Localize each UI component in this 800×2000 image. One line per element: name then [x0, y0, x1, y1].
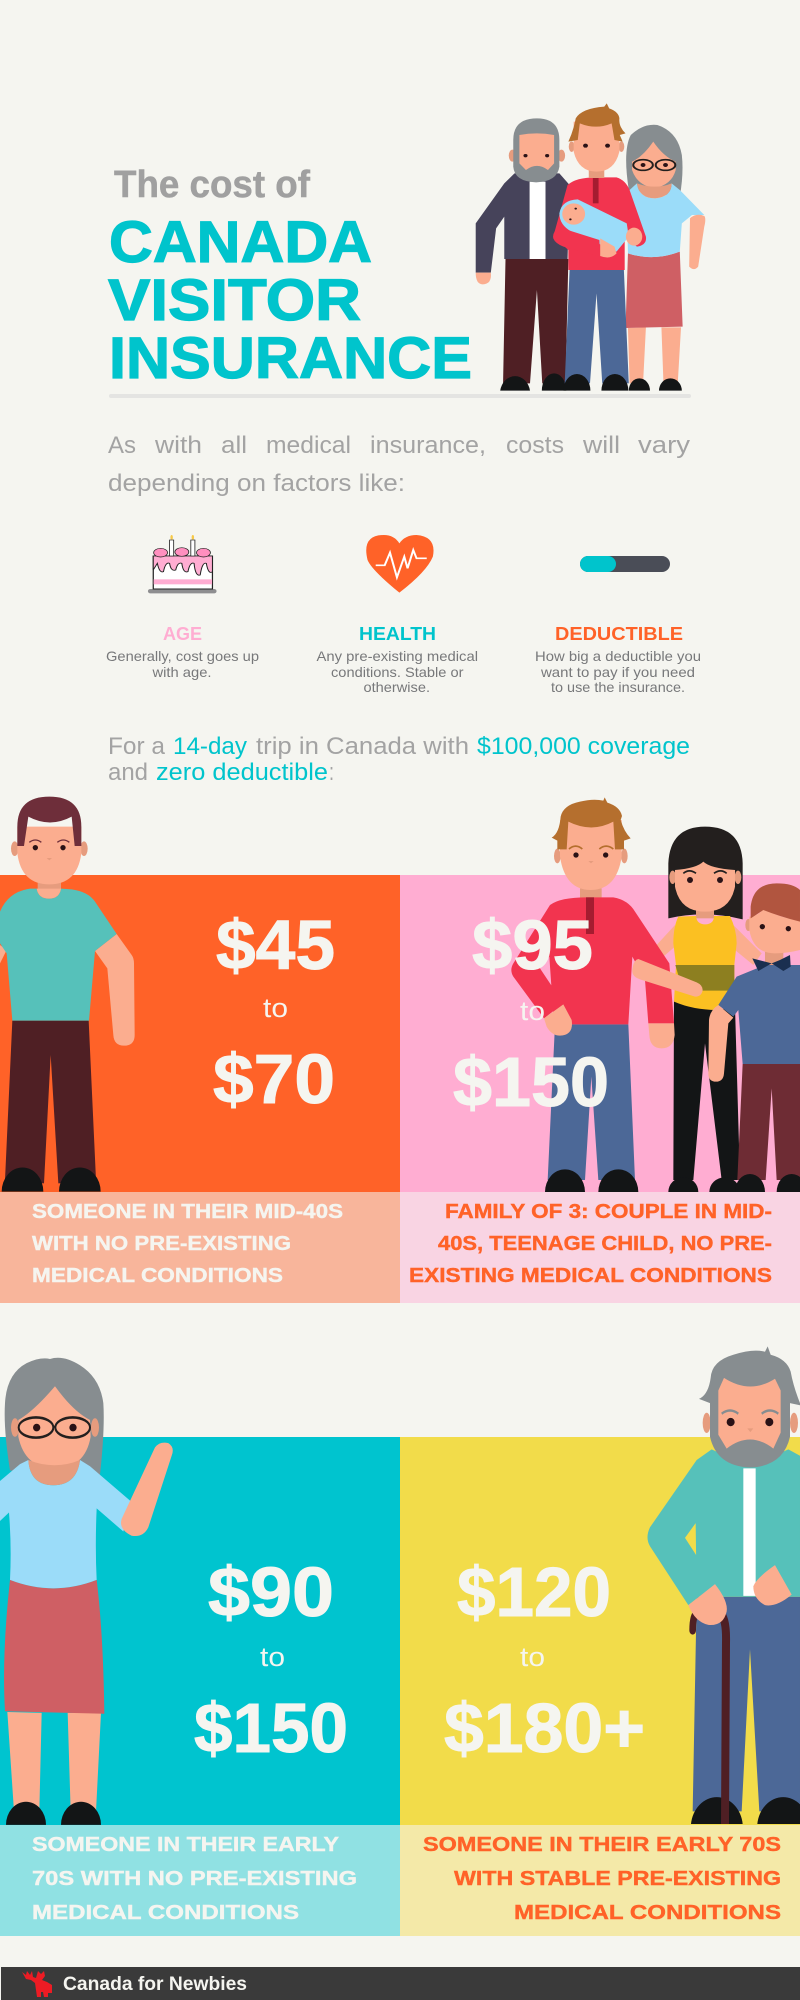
intro text — [108, 432, 690, 497]
panel: someone in early 70s, stable conditions — [400, 1346, 800, 1936]
text: trip assumptions: and — [108, 759, 148, 786]
price: $95 to $150: $150 — [453, 1043, 609, 1121]
figure: dad — [511, 797, 703, 1192]
title: Canada Visitor Insurance: VISITOR — [108, 268, 361, 333]
title: Canada Visitor Insurance — [108, 210, 472, 391]
caption text: family of 3 — [409, 1201, 772, 1287]
text: trip assumptions: : — [329, 759, 334, 786]
factor: age: AGE — [163, 624, 202, 644]
heading: the cost of: The cost of — [114, 164, 310, 206]
caption text: family of 3: 40S, TEENAGE CHILD, NO PRE- — [438, 1233, 772, 1255]
intro text: all — [221, 432, 247, 459]
price: $90 to $150 — [194, 1553, 348, 1767]
caption text: early 70s stable conditions: SOMEONE IN THEIR EARLY 70S — [423, 1834, 781, 1856]
price: $120 to $180+: to — [520, 1642, 545, 1672]
price: $45 to $70: $45 — [216, 906, 335, 984]
price: $45 to $70: to — [263, 993, 288, 1023]
price: $90 to $150: to — [260, 1642, 285, 1672]
caption text: early 70s stable conditions: WITH STABLE PRE-EXISTING — [454, 1868, 781, 1890]
factor: health: Any pre-existing medical — [316, 648, 478, 664]
caption text: early 70s no conditions: 70S WITH NO PRE-EXISTING — [32, 1868, 357, 1890]
panel: someone in early 70s, no conditions — [0, 1358, 400, 1936]
factor: deductible: DEDUCTIBLE — [555, 624, 683, 644]
caption text: family of 3: EXISTING MEDICAL CONDITIONS — [409, 1265, 772, 1287]
icon: red moose logo — [22, 1971, 52, 1997]
factor: age: with age. — [151, 664, 212, 680]
icon: heart with pulse — [366, 535, 434, 593]
caption text: mid-40s: SOMEONE IN THEIR MID-40S — [32, 1201, 343, 1223]
caption band: early 70s no conditions — [0, 1825, 400, 1936]
intro text: with — [154, 432, 202, 459]
text: trip assumptions: $100,000 coverage — [477, 733, 690, 760]
intro text: As — [108, 432, 136, 459]
intro text: will — [582, 432, 620, 459]
factor: deductible: How big a deductible you — [535, 648, 701, 664]
figure: grandmother waving — [0, 1358, 173, 1825]
price: $90 to $150: $90 — [208, 1553, 334, 1631]
figure: grandpa — [476, 118, 570, 391]
caption text: mid-40s: WITH NO PRE-EXISTING — [32, 1233, 291, 1255]
price: $120 to $180+: $180+ — [444, 1689, 645, 1767]
price: $120 to $180+ — [444, 1553, 645, 1767]
factor: health: HEALTH — [359, 624, 436, 644]
price: $95 to $150 — [453, 906, 609, 1121]
figure: mother — [657, 827, 762, 1192]
figure: grandma — [626, 125, 705, 391]
caption text: mid-40s — [32, 1201, 343, 1287]
factor: health — [316, 624, 478, 695]
price: $45 to $70: $70 — [213, 1040, 335, 1118]
text: trip assumptions: zero deductible — [156, 759, 328, 786]
factor: age — [106, 624, 259, 680]
figure: grandfather with cane — [647, 1346, 800, 1824]
factor: deductible: to use the insurance. — [551, 679, 685, 695]
intro text: depending on factors like: — [108, 470, 405, 497]
divider rule under title — [109, 394, 691, 398]
caption text: early 70s no conditions — [32, 1834, 357, 1924]
price: $120 to $180+: $120 — [457, 1553, 611, 1631]
factor: health: conditions. Stable or — [331, 664, 464, 680]
caption text: early 70s no conditions: MEDICAL CONDITIONS — [32, 1902, 299, 1924]
factor: deductible — [535, 624, 701, 695]
footer text: Canada for Newbies — [63, 1973, 247, 1995]
price: $95 to $150: $95 — [472, 906, 593, 984]
title: Canada Visitor Insurance: CANADA — [109, 210, 372, 275]
text: trip assumptions: trip in Canada with — [256, 733, 469, 760]
intro text: medical — [266, 432, 351, 459]
icon: deductible slider — [580, 556, 670, 572]
intro text: vary — [638, 432, 690, 459]
footer bar — [1, 1967, 800, 2000]
caption text: early 70s stable conditions — [423, 1834, 781, 1924]
illustration: family group — [476, 103, 705, 391]
caption text: early 70s stable conditions: MEDICAL CONDITIONS — [514, 1902, 781, 1924]
caption band: family of 3 — [400, 1192, 800, 1303]
factor: deductible: want to pay if you need — [540, 664, 695, 680]
caption text: mid-40s: MEDICAL CONDITIONS — [32, 1265, 283, 1287]
factor: health: otherwise. — [364, 679, 430, 695]
text: trip assumptions: 14-day — [173, 733, 247, 760]
icon: birthday cake — [148, 535, 217, 593]
figures: family of three — [511, 797, 800, 1192]
price: $95 to $150: to — [520, 996, 545, 1026]
intro text: insurance, — [370, 432, 486, 459]
caption text: early 70s no conditions: SOMEONE IN THEIR EARLY — [32, 1834, 340, 1856]
figure: dad holding baby — [553, 103, 646, 391]
text: trip assumptions — [108, 733, 690, 786]
caption band: early 70s stable conditions — [400, 1825, 800, 1936]
factor: age: Generally, cost goes up — [106, 648, 259, 664]
panel: family of 3 — [400, 797, 800, 1303]
figure: man in teal t-shirt — [0, 797, 135, 1192]
caption band: mid-40s — [0, 1192, 400, 1303]
intro text: costs — [506, 432, 564, 459]
title: Canada Visitor Insurance: INSURANCE — [109, 326, 472, 391]
caption text: family of 3: FAMILY OF 3: COUPLE IN MID- — [445, 1201, 772, 1223]
price: $45 to $70 — [213, 906, 335, 1118]
text: trip assumptions: For a — [108, 733, 166, 760]
panel: someone in their mid-40s — [0, 797, 400, 1303]
price: $90 to $150: $150 — [194, 1689, 348, 1767]
figure: teenage son — [708, 883, 800, 1192]
